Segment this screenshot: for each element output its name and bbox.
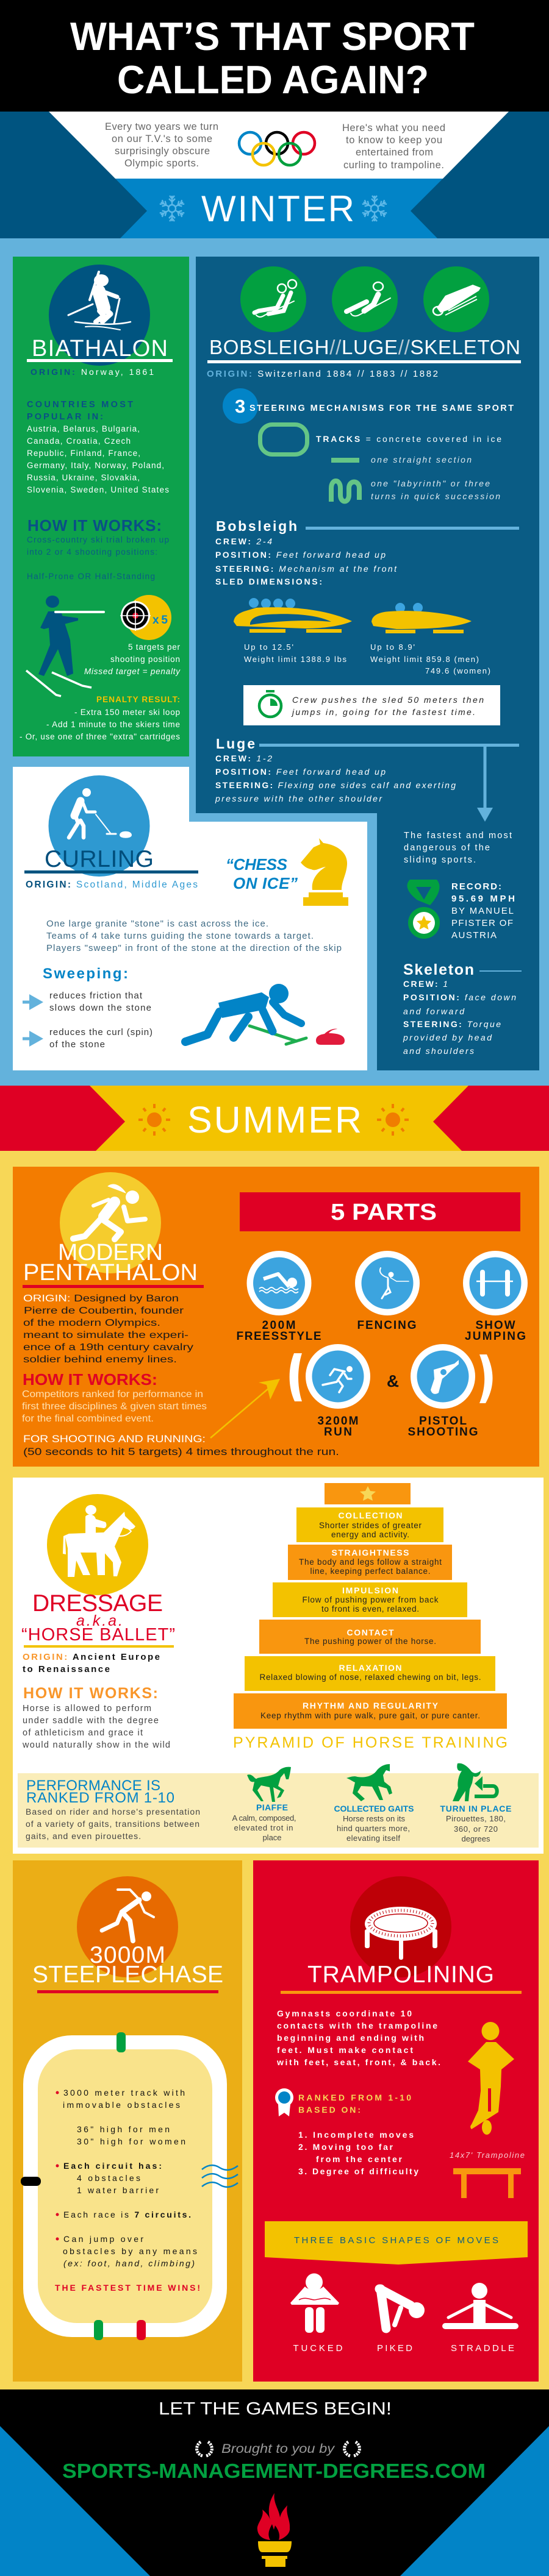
track facts: Each race is 7 circuits. bbox=[63, 2210, 191, 2219]
trampolining description bbox=[276, 2008, 440, 2067]
arrow: luge to skeleton bbox=[259, 744, 519, 822]
shape: tucked: TUCKED bbox=[293, 2343, 343, 2354]
intro text left: Every two years we turn bbox=[105, 121, 218, 132]
bobsleigh facts: POSITION: Feet forward head up bbox=[215, 550, 386, 560]
record text: PFISTER OF bbox=[451, 918, 513, 928]
icon: laurel left bbox=[197, 2442, 212, 2456]
Olympic rings bbox=[239, 132, 315, 165]
heading: aka horse ballet bbox=[21, 1612, 175, 1645]
icon: track bbox=[23, 2035, 227, 2337]
pyramid level: collection: energy and activity. bbox=[331, 1530, 409, 1539]
curling description: One large granite "stone" is cast across the ice. bbox=[46, 919, 268, 929]
icon: steeple runner bbox=[102, 1890, 154, 1941]
sled dimensions text: Up to 8.9' bbox=[370, 642, 415, 652]
penalty result: - Extra 150 meter ski loop bbox=[74, 708, 180, 717]
how it works: HOW IT WORKS: bbox=[23, 1370, 157, 1389]
tracks text: TRACKS = concrete covered in ice bbox=[316, 434, 501, 444]
icon: medal bbox=[407, 880, 440, 939]
icon: trampoline bbox=[365, 1907, 437, 1960]
move: piaffe: elevated trot in bbox=[234, 1823, 293, 1832]
penalty result: - Or, use one of three "extra" cartridges bbox=[20, 732, 180, 741]
shooting and running text: (50 seconds to hit 5 targets) 4 times throughout the run. bbox=[23, 1446, 339, 1457]
trampolining description: with feet, seat, front, & back. bbox=[276, 2057, 440, 2067]
shape: straddle bbox=[445, 2283, 515, 2354]
skeleton facts: and shoulders bbox=[403, 1046, 474, 1056]
move: turn in place: Pirouettes, 180, bbox=[446, 1814, 506, 1823]
ranked text: BASED ON: bbox=[298, 2105, 361, 2115]
pyramid level: impulsion: IMPULSION bbox=[342, 1585, 398, 1595]
icon: bobsleigh bbox=[240, 266, 306, 332]
track facts: (ex: foot, hand, climbing) bbox=[63, 2258, 195, 2268]
pyramid level: collection: Shorter strides of greater bbox=[319, 1521, 422, 1530]
banner: 5 parts bbox=[240, 1192, 520, 1231]
bobsleigh facts: SLED DIMENSIONS: bbox=[215, 577, 322, 586]
ranked list: from the center bbox=[316, 2154, 403, 2164]
arrow: to shooting and running bbox=[210, 1379, 280, 1438]
performance ranking: RANKED FROM 1-10 bbox=[26, 1790, 174, 1806]
brought to you by: Brought to you by bbox=[221, 2442, 336, 2456]
move: turn in place: degrees bbox=[462, 1834, 490, 1843]
intro text left bbox=[105, 121, 218, 169]
bobsleigh facts: STEERING: Mechanism at the front bbox=[215, 564, 397, 574]
origin: ence of a 19th century cavalry bbox=[23, 1342, 193, 1353]
heading: modern pentathalon bbox=[23, 1240, 198, 1286]
bobsleigh facts: Bobsleigh bbox=[216, 518, 297, 534]
title bbox=[70, 14, 475, 102]
icon: shooter bbox=[26, 596, 104, 696]
part: fencing bbox=[355, 1251, 420, 1332]
icon: torch bbox=[257, 2493, 292, 2567]
pyramid level: straightness: STRAIGHTNESS bbox=[332, 1548, 409, 1557]
icon: skeleton bbox=[423, 266, 489, 332]
heading: winter: WINTER bbox=[201, 188, 354, 229]
icon: four man sled bbox=[234, 598, 352, 631]
icon: target x5 bbox=[120, 595, 171, 640]
move: collected gaits: elevating itself bbox=[346, 1834, 400, 1843]
ranked text: RANKED FROM 1-10 bbox=[298, 2093, 411, 2102]
countries list: POPULAR IN: bbox=[27, 412, 103, 422]
how it works: Horse is allowed to perform bbox=[23, 1704, 151, 1713]
countries list bbox=[27, 400, 169, 494]
track facts: 4 obstacles bbox=[77, 2173, 140, 2183]
skeleton facts: and forward bbox=[403, 1006, 465, 1016]
callout: crew pushes bbox=[243, 685, 500, 725]
ranked list: 3. Degree of difficulty bbox=[298, 2166, 418, 2176]
move: collected gaits: hind quarters more, bbox=[337, 1824, 410, 1833]
part: show jumping: JUMPING bbox=[465, 1330, 526, 1343]
origin: to Renaissance bbox=[23, 1664, 110, 1674]
shape: straddle: STRADDLE bbox=[451, 2343, 514, 2354]
sweeping benefit 2: reduces the curl (spin) bbox=[49, 1027, 152, 1037]
heading: sweeping: Sweeping: bbox=[43, 966, 128, 982]
heading: modern pentathalon: PENTATHALON bbox=[23, 1260, 198, 1286]
icon: snowflake right bbox=[362, 196, 387, 221]
skeleton facts bbox=[403, 961, 522, 1056]
record text: AUSTRIA bbox=[451, 930, 497, 941]
bobsleigh facts: CREW: 2-4 bbox=[215, 536, 272, 546]
how it works: Competitors ranked for performance in bbox=[22, 1389, 203, 1400]
move: collected gaits: Horse rests on its bbox=[343, 1814, 405, 1823]
move: piaffe: PIAFFE bbox=[256, 1802, 288, 1812]
shape: tucked bbox=[290, 2274, 343, 2354]
how it works: HOW IT WORKS: bbox=[23, 1685, 158, 1702]
pyramid level: straightness bbox=[288, 1545, 452, 1580]
part: pistol shooting bbox=[407, 1344, 478, 1439]
icon: skier bbox=[68, 272, 131, 330]
intro text left: on our T.V.'s to some bbox=[112, 133, 212, 144]
sled dimensions text: 749.6 (women) bbox=[425, 666, 490, 675]
trampolining description: feet. Must make contact bbox=[277, 2045, 413, 2055]
performance ranking: gaits, and even pirouettes. bbox=[26, 1831, 141, 1841]
sled dimensions text bbox=[244, 642, 490, 675]
icon: luge bbox=[332, 266, 398, 332]
move: turn in place: 360, or 720 bbox=[454, 1824, 498, 1834]
icon: water barrier bbox=[202, 2165, 238, 2187]
panel: dressage bbox=[13, 1478, 544, 1854]
quote: chess on ice: ON ICE” bbox=[233, 874, 298, 892]
quote: chess on ice bbox=[226, 855, 298, 892]
icon: laurel right bbox=[345, 2442, 359, 2456]
intro band with Olympic rings bbox=[0, 112, 549, 238]
how it works: for the final combined event. bbox=[22, 1414, 154, 1424]
pyramid level: impulsion bbox=[273, 1582, 467, 1617]
countries list: COUNTRIES MOST bbox=[27, 400, 133, 410]
pyramid level: straightness: line, keeping perfect balance. bbox=[310, 1567, 431, 1576]
performance ranking: Based on rider and horse's presentation bbox=[26, 1807, 200, 1816]
cream strip bbox=[18, 1763, 539, 1848]
fastest text bbox=[404, 831, 512, 865]
pyramid level: contact bbox=[259, 1620, 481, 1654]
3 steering mechanisms bbox=[223, 388, 514, 424]
intro text left: surprisingly obscure bbox=[115, 146, 210, 157]
icon: ribbon bbox=[275, 2088, 293, 2116]
banner: three basic shapes bbox=[265, 2221, 528, 2265]
icon: sun left bbox=[138, 1104, 170, 1136]
sweeping benefit 1: slows down the stone bbox=[49, 1003, 151, 1013]
footer bbox=[0, 2389, 549, 2576]
origin bbox=[23, 1293, 193, 1365]
part: pistol shooting: PISTOL bbox=[419, 1415, 467, 1428]
track facts: Each circuit has: bbox=[63, 2161, 162, 2171]
callout: crew pushes: jumps in, going for the fastest time. bbox=[291, 707, 475, 717]
track facts: obstacles by any means bbox=[63, 2246, 197, 2256]
icon: labyrinth bbox=[331, 481, 359, 502]
how it works: under saddle with the degree bbox=[23, 1716, 159, 1726]
luge facts: pressure with the other shoulder bbox=[215, 794, 382, 803]
icon: stopwatch bbox=[259, 690, 281, 717]
how it works bbox=[22, 1370, 207, 1424]
track facts: Can jump over bbox=[63, 2234, 143, 2244]
pyramid level: collection: COLLECTION bbox=[338, 1510, 403, 1520]
countries list: Canada, Croatia, Czech bbox=[27, 436, 131, 446]
luge facts: Luge bbox=[216, 736, 255, 752]
sweeping benefit 1: reduces friction that bbox=[49, 991, 143, 1001]
icon: trampolinist bbox=[468, 2022, 514, 2135]
heading: bobsleigh luge skeleton: BOBSLEIGH//LUGE//SKELETON bbox=[209, 336, 520, 358]
origin bbox=[23, 1652, 160, 1674]
shooting text: 5 targets per bbox=[128, 642, 181, 652]
heading: 3000m steeplechase: 3000M bbox=[90, 1942, 165, 1968]
bobsleigh facts bbox=[215, 518, 519, 586]
record text: 95.69 MPH bbox=[451, 894, 515, 904]
pyramid level: relaxation: RELAXATION bbox=[339, 1663, 401, 1673]
record text: BY MANUEL bbox=[451, 906, 514, 916]
sweeping benefit 2: of the stone bbox=[49, 1039, 105, 1050]
icon: runner bbox=[73, 1184, 145, 1239]
track facts: 36" high for men bbox=[77, 2124, 170, 2134]
obstacle markers bbox=[21, 2032, 146, 2340]
shooting text: Missed target = penalty bbox=[84, 667, 181, 676]
pyramid level: rhythm and regularity: RHYTHM AND REGULARITY bbox=[303, 1701, 439, 1710]
banner: 5 parts: 5 PARTS bbox=[331, 1200, 437, 1225]
sled dimensions text: Weight limit 859.8 (men) bbox=[370, 655, 479, 664]
intro text right: entertained from bbox=[356, 147, 433, 158]
panel: 3000m steeplechase bbox=[13, 1860, 242, 2382]
heading: trampolining: TRAMPOLINING bbox=[307, 1962, 494, 1988]
part: swimming bbox=[237, 1251, 321, 1343]
icon: curling stone bbox=[316, 1029, 345, 1045]
icon: track bbox=[260, 424, 307, 455]
shape: piked bbox=[377, 2289, 425, 2354]
panel: biathlon bbox=[13, 257, 189, 756]
skeleton facts: Skeleton bbox=[403, 961, 474, 978]
ranked list bbox=[298, 2130, 418, 2176]
origin: soldier behind enemy lines. bbox=[23, 1354, 177, 1365]
move: turn in place: TURN IN PLACE bbox=[440, 1804, 511, 1813]
luge facts bbox=[215, 736, 456, 803]
countries list: Austria, Belarus, Bulgaria, bbox=[27, 424, 140, 433]
performance ranking: of a variety of gaits, transitions between bbox=[26, 1819, 199, 1829]
part: pistol shooting: SHOOTING bbox=[407, 1426, 478, 1439]
part: 3200m run: RUN bbox=[324, 1426, 352, 1439]
3 steering mechanisms: 3 bbox=[235, 396, 245, 417]
origin: ORIGIN: Ancient Europe bbox=[23, 1652, 160, 1662]
skeleton facts: STEERING: Torque bbox=[403, 1019, 501, 1029]
track facts: THE FASTEST TIME WINS! bbox=[55, 2283, 200, 2293]
banner: three basic shapes: THREE BASIC SHAPES OF MOVES bbox=[294, 2235, 498, 2246]
track facts: 3000 meter track with bbox=[63, 2088, 185, 2097]
origin: Pierre de Coubertin, founder bbox=[24, 1306, 184, 1316]
countries list: Republic, Finland, France, bbox=[27, 449, 140, 458]
intro text right: to know to keep you bbox=[346, 135, 442, 146]
origin: ORIGIN: Designed by Baron bbox=[23, 1293, 179, 1304]
panel: curling bbox=[13, 767, 367, 1070]
intro text right: Here's what you need bbox=[342, 123, 445, 133]
icon: snowflake left bbox=[159, 196, 185, 221]
curling description: Players "sweep" in front of the stone at the direction of the skip bbox=[46, 943, 342, 953]
origin: ORIGIN: Switzerland 1884 // 1883 // 1882 bbox=[207, 369, 438, 379]
track facts: 30" high for women bbox=[77, 2137, 185, 2146]
labyrinth text: turns in quick succession bbox=[371, 491, 500, 501]
3 steering mechanisms: STEERING MECHANISMS FOR THE SAME SPORT bbox=[249, 404, 514, 413]
icon: curler bbox=[69, 788, 131, 838]
penalty result: PENALTY RESULT: bbox=[96, 695, 180, 704]
brackets bbox=[290, 1353, 493, 1403]
icon: trampoline side view bbox=[453, 2168, 521, 2198]
title: WHAT’S THAT SPORT bbox=[70, 14, 475, 59]
move: piaffe: place bbox=[262, 1833, 282, 1842]
intro text right bbox=[342, 123, 445, 171]
icon: horse rider bbox=[63, 1505, 135, 1577]
labyrinth text bbox=[371, 479, 500, 501]
panel: trampolining bbox=[253, 1860, 539, 2382]
origin: ORIGIN: Norway, 1861 bbox=[30, 367, 154, 377]
shooting text bbox=[84, 642, 181, 676]
callout: crew pushes: Crew pushes the sled 50 meters then bbox=[292, 695, 484, 705]
summer banner bbox=[0, 1086, 549, 1151]
how it works: first three disciplines & given start times bbox=[22, 1401, 207, 1412]
heading: modern pentathalon: MODERN bbox=[58, 1240, 163, 1265]
how it works bbox=[27, 516, 169, 581]
sled dimensions text: Up to 12.5' bbox=[244, 642, 293, 652]
luge facts: POSITION: Feet forward head up bbox=[215, 767, 386, 777]
ranked list: 1. Incomplete moves bbox=[298, 2130, 414, 2140]
heading: aka horse ballet: a.k.a. bbox=[76, 1612, 123, 1629]
part: 3200m run: 3200M bbox=[317, 1415, 359, 1428]
heading: biathalon: BIATHALON bbox=[32, 336, 168, 361]
heading: dressage: DRESSAGE bbox=[32, 1590, 163, 1617]
panel: modern pentathlon bbox=[13, 1167, 539, 1467]
penalty result: - Add 1 minute to the skiers time bbox=[46, 720, 180, 729]
part: show jumping bbox=[463, 1251, 528, 1343]
heading: curling: CURLING bbox=[45, 846, 154, 872]
part: swimming: FREESSTYLE bbox=[237, 1330, 321, 1343]
shooting text: shooting position bbox=[110, 655, 180, 664]
trampolining description: Gymnasts coordinate 10 bbox=[277, 2008, 412, 2018]
how it works: would naturally show in the wild bbox=[22, 1740, 170, 1750]
icon: chess knight bbox=[301, 838, 348, 906]
trampolining description: beginning and ending with bbox=[277, 2033, 424, 2043]
sweeping benefit 2 bbox=[23, 1027, 152, 1050]
intro text left: Olympic sports. bbox=[124, 158, 199, 169]
fastest text: dangerous of the bbox=[404, 843, 490, 853]
pyramid level: contact: The pushing power of the horse. bbox=[304, 1637, 436, 1646]
how it works: Cross-country ski trial broken up bbox=[27, 535, 169, 544]
how it works: of athleticism and grace it bbox=[23, 1728, 143, 1738]
pyramid level: impulsion: to front is even, relaxed. bbox=[321, 1604, 419, 1614]
shooting and running text: FOR SHOOTING AND RUNNING: bbox=[23, 1434, 206, 1445]
pyramid level: straightness: The body and legs follow a straight bbox=[299, 1557, 442, 1567]
part: 3200m run bbox=[306, 1344, 370, 1439]
move: collected gaits bbox=[334, 1764, 414, 1843]
ranked text bbox=[298, 2093, 411, 2115]
intro text right: curling to trampoline. bbox=[343, 160, 444, 171]
fastest text: The fastest and most bbox=[404, 831, 512, 841]
ranked list: 2. Moving too far bbox=[298, 2142, 393, 2152]
icon: straight section bbox=[331, 458, 359, 463]
header: black title band bbox=[0, 0, 549, 112]
part: show jumping: SHOW bbox=[476, 1319, 515, 1332]
pyramid level: collection bbox=[296, 1507, 443, 1542]
pyramid level: impulsion: Flow of pushing power from back bbox=[303, 1595, 439, 1604]
skeleton facts: POSITION: face down bbox=[403, 992, 516, 1002]
origin: meant to simulate the experi- bbox=[23, 1330, 188, 1340]
track facts bbox=[55, 2088, 200, 2293]
straight text: one straight section bbox=[371, 455, 472, 464]
icon: two man sled bbox=[371, 603, 472, 632]
curling description bbox=[46, 919, 342, 953]
heading: 3000m steeplechase bbox=[32, 1942, 223, 1988]
labyrinth text: one "labyrinth" or three bbox=[371, 479, 490, 488]
origin: of the modern Olympics. bbox=[23, 1318, 160, 1328]
heading: 3000m steeplechase: STEEPLECHASE bbox=[32, 1962, 223, 1988]
icon: sun right bbox=[377, 1104, 409, 1136]
track facts: immovable obstacles bbox=[63, 2100, 180, 2110]
countries list: Slovenia, Sweden, United States bbox=[27, 485, 169, 494]
quote: chess on ice: “CHESS bbox=[226, 855, 288, 873]
how it works bbox=[22, 1685, 170, 1750]
how it works: Half-Prone OR Half-Standing bbox=[27, 572, 155, 581]
record text: RECORD: bbox=[451, 881, 501, 892]
performance ranking: PERFORMANCE IS bbox=[26, 1777, 160, 1794]
countries list: Germany, Italy, Norway, Poland, bbox=[27, 461, 164, 470]
fastest text: sliding sports. bbox=[404, 855, 476, 865]
luge facts: CREW: 1-2 bbox=[215, 753, 272, 763]
countries list: Russia, Ukraine, Slovakia, bbox=[27, 473, 140, 482]
skeleton facts: provided by head bbox=[403, 1033, 492, 1042]
pyramid level: relaxation: Relaxed blowing of nose, relaxed chewing on bit, legs. bbox=[260, 1673, 481, 1682]
winter banner bbox=[115, 179, 443, 238]
pyramid caption: PYRAMID OF HORSE TRAINING bbox=[233, 1734, 508, 1751]
trampolining description: contacts with the trampoline bbox=[277, 2021, 437, 2030]
pyramid level: relaxation bbox=[245, 1656, 495, 1691]
summer section background bbox=[0, 1151, 549, 2389]
heading: aka horse ballet: “HORSE BALLET” bbox=[21, 1625, 175, 1645]
move: collected gaits: COLLECTED GAITS bbox=[334, 1804, 414, 1813]
heading: summer: SUMMER bbox=[187, 1099, 362, 1140]
shape: piked: PIKED bbox=[377, 2343, 412, 2354]
penalty result bbox=[20, 695, 180, 741]
part: fencing: FENCING bbox=[357, 1319, 416, 1332]
how it works: HOW IT WORKS: bbox=[27, 516, 162, 535]
sled dimensions text: Weight limit 1388.9 lbs bbox=[244, 655, 346, 664]
sweeping benefit 1 bbox=[23, 991, 151, 1013]
trampoline size label: 14x7' Trampoline bbox=[450, 2151, 525, 2160]
title: CALLED AGAIN? bbox=[117, 57, 429, 102]
part: swimming: 200M bbox=[262, 1319, 295, 1332]
pyramid of horse training bbox=[233, 1483, 508, 1751]
winter section background bbox=[0, 238, 549, 1086]
origin: ORIGIN: Scotland, Middle Ages bbox=[26, 880, 198, 890]
record text bbox=[451, 881, 515, 941]
how it works: into 2 or 4 shooting positions: bbox=[27, 547, 157, 557]
panel: bobsleigh, luge, skeleton bbox=[196, 257, 539, 1070]
icon: target x5: x5 bbox=[152, 614, 168, 627]
skeleton facts: CREW: 1 bbox=[403, 979, 448, 989]
website: SPORTS-MANAGEMENT-DEGREES.COM bbox=[62, 2460, 486, 2482]
move: piaffe bbox=[232, 1767, 296, 1842]
shooting and running text bbox=[23, 1434, 339, 1457]
pyramid level: contact: CONTACT bbox=[346, 1628, 394, 1637]
performance ranking bbox=[26, 1777, 200, 1841]
closing line: LET THE GAMES BEGIN! bbox=[159, 2399, 392, 2419]
ampersand: & bbox=[387, 1372, 399, 1390]
luge facts: STEERING: Flexing one sides calf and exerting bbox=[215, 780, 456, 790]
pyramid level: rhythm and regularity bbox=[234, 1693, 507, 1729]
move: turn in place bbox=[440, 1763, 511, 1843]
track facts: 1 water barrier bbox=[77, 2185, 159, 2195]
icon: sweeper bbox=[185, 984, 306, 1044]
pyramid level: rhythm and regularity: Keep rhythm with pure walk, pure gait, or pure canter. bbox=[260, 1711, 480, 1720]
move: piaffe: A calm, composed, bbox=[232, 1813, 296, 1823]
curling description: Teams of 4 take turns guiding the stone towards a target. bbox=[46, 931, 314, 941]
